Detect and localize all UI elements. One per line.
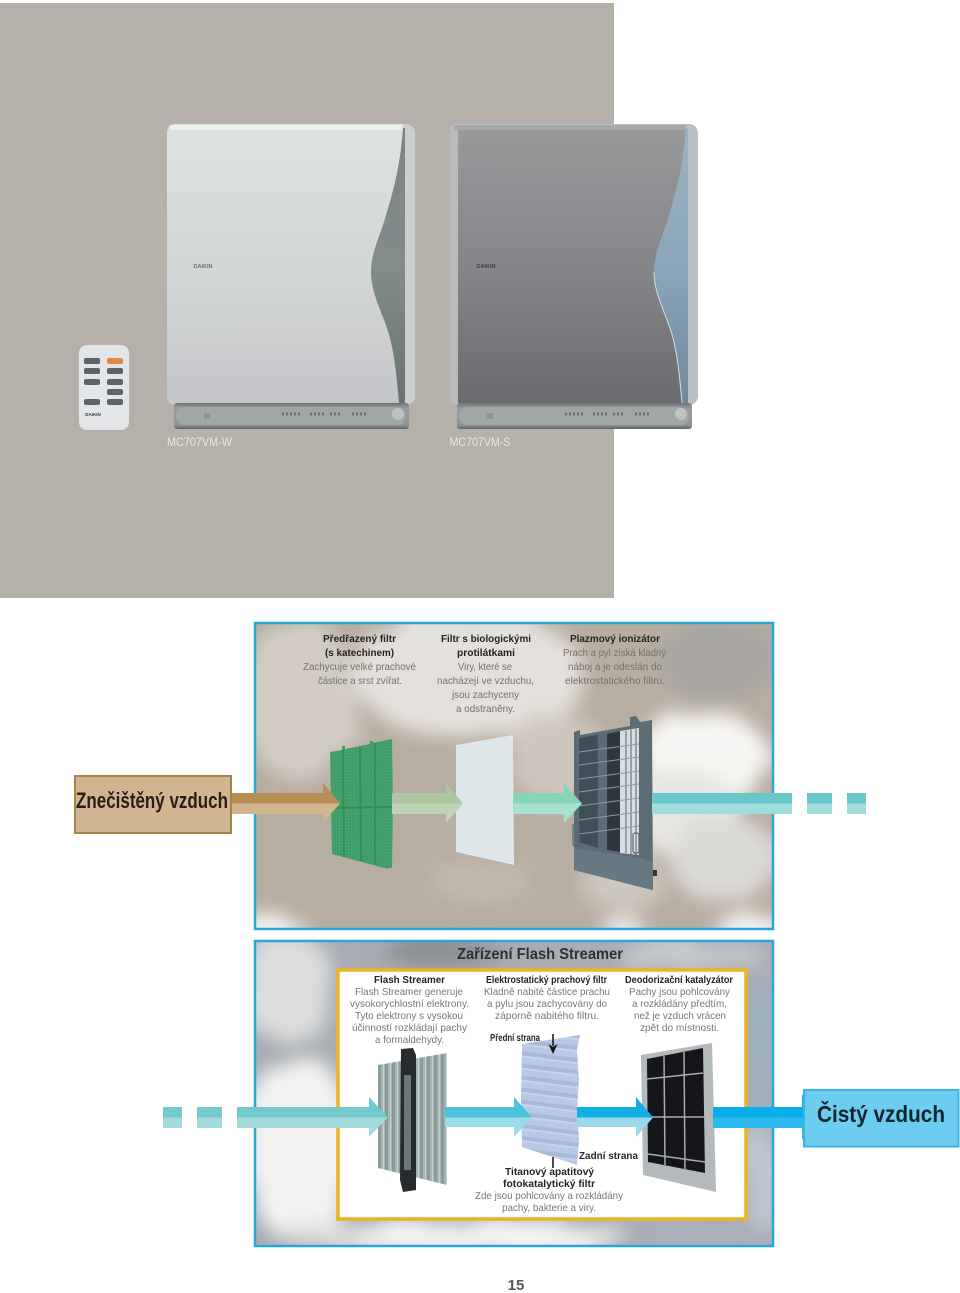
text block: antibody filter: a odstraněny.: [456, 703, 515, 715]
panel: upper cloud filter panel: [254, 622, 774, 930]
label: rear side and marker line: Zadní strana: [579, 1150, 638, 1162]
text block: Flash Streamer: a formaldehydy.: [375, 1034, 444, 1046]
text block: antibody filter: protilátkami: [457, 647, 515, 659]
label: MC707VM-S: MC707VM-S: [450, 435, 510, 449]
arrow: green: [392, 783, 463, 823]
text block: pre-filter: (s katechinem): [325, 647, 394, 659]
text block: antibody filter: Viry, které se: [458, 661, 512, 673]
text block: titanium apatite filter: Zde jsou pohlcovány a rozkládány: [475, 1190, 624, 1202]
filter: grey plasma ionizer: [573, 716, 657, 890]
text block: electrostatic dust filter: Kladně nabité částice prachu: [484, 986, 610, 998]
panel: product photo background: [0, 3, 614, 598]
text block: pre-filter: Předřazený filtr: [323, 633, 396, 645]
text block: antibody filter: jsou zachyceny: [451, 689, 520, 701]
callout: dirty air: Znečištěný vzduch: [76, 788, 228, 813]
text block: electrostatic dust filter: a pylu jsou zachycovány do: [487, 998, 607, 1010]
text block: electrostatic dust filter: [484, 974, 610, 1022]
text block: pre-filter: částice a srst zvířat.: [318, 675, 402, 687]
arrow: teal entry with dashes: [163, 1097, 388, 1137]
text block: plasma ionizer: Plazmový ionizátor: [570, 633, 660, 645]
text block: titanium apatite filter: [475, 1166, 624, 1214]
text block: Flash Streamer: Flash Streamer: [374, 974, 445, 986]
text block: deodorizing catalyst: než je vzduch vrácen: [634, 1010, 726, 1022]
control bar: white unit: [174, 403, 409, 429]
text block: deodorizing catalyst: [625, 974, 733, 1034]
icon: remote control: DAIKIN: [85, 412, 101, 417]
arrow: light blue: [445, 1097, 532, 1137]
text block: plasma ionizer: náboj a je odeslán do: [568, 661, 662, 673]
text block: titanium apatite filter: fotokatalytický filtr: [503, 1178, 595, 1190]
product: white air purifier MC707VM-W: [167, 124, 415, 429]
label: rear side and marker line: [553, 1150, 638, 1168]
text block: deodorizing catalyst: Pachy jsou pohlcovány: [629, 986, 731, 998]
text block: antibody filter: [437, 633, 534, 715]
arrow: blue: [577, 1097, 653, 1137]
arrow: mint: [513, 783, 582, 823]
filter: Flash Streamer unit: [378, 1048, 447, 1192]
filter: green pre-filter: [330, 739, 393, 869]
logo: DAIKIN on white unit: DAIKIN: [194, 264, 212, 270]
callout: clean air: Čistý vzduch: [817, 1100, 945, 1127]
text block: Flash Streamer: vysokorychlostní elektrony.: [350, 998, 469, 1010]
text block: Flash Streamer: účinností rozkládají pachy: [352, 1022, 468, 1034]
text block: antibody filter: nacházejí ve vzduchu,: [437, 675, 534, 687]
text block: electrostatic dust filter: Elektrostatický prachový filtr: [486, 974, 607, 986]
text block: deodorizing catalyst: Deodorizační katalyzátor: [625, 974, 733, 986]
text block: Flash Streamer: [350, 974, 469, 1046]
filter: deodorizing catalyst: [641, 1043, 716, 1192]
label: front side with arrow: Přední strana: [490, 1033, 540, 1044]
heading: Flash Streamer unit: Zařízení Flash Streamer: [457, 946, 623, 963]
icon: remote control: [79, 345, 129, 430]
text block: electrostatic dust filter: záporně nabitého filtru.: [495, 1010, 599, 1022]
text block: titanium apatite filter: pachy, bakterie a viry.: [502, 1202, 596, 1214]
label: MC707VM-W: MC707VM-W: [167, 435, 233, 449]
text block: plasma ionizer: [563, 633, 667, 687]
panel: lower Flash Streamer panel: [237, 930, 780, 1256]
text block: deodorizing catalyst: a rozkládány předtím,: [632, 998, 727, 1010]
filter: white antibody filter: [456, 735, 514, 865]
callout: clean air: [804, 1090, 958, 1146]
text block: pre-filter: [303, 633, 416, 687]
callout: dirty air: [75, 776, 231, 833]
text block: plasma ionizer: elektrostatického filtru.: [565, 675, 665, 687]
logo: DAIKIN on silver unit: DAIKIN: [477, 264, 495, 270]
arrow: brown from dirty air: [231, 783, 340, 823]
filter: pleated electrostatic filter: [521, 1035, 580, 1165]
text block: antibody filter: Filtr s biologickými: [441, 633, 531, 645]
arrow: teal with dashes: [652, 793, 866, 814]
panel: yellow outlined box: [338, 970, 746, 1219]
text block: plasma ionizer: Prach a pyl získá kladný: [563, 647, 667, 659]
control bar: silver unit: [457, 403, 692, 429]
text block: deodorizing catalyst: zpět do místnosti.: [640, 1022, 719, 1034]
text block: Flash Streamer: Tyto elektrony s vysokou: [355, 1010, 463, 1022]
text block: Flash Streamer: Flash Streamer generuje: [355, 986, 463, 998]
product: silver air purifier MC707VM-S: [450, 124, 698, 429]
text block: pre-filter: Zachycuje velké prachové: [303, 661, 416, 673]
label: front side with arrow: [490, 1033, 558, 1054]
text block: titanium apatite filter: Titanový apatitový: [505, 1166, 594, 1178]
arrow: bright blue to clean air: [713, 1094, 816, 1140]
